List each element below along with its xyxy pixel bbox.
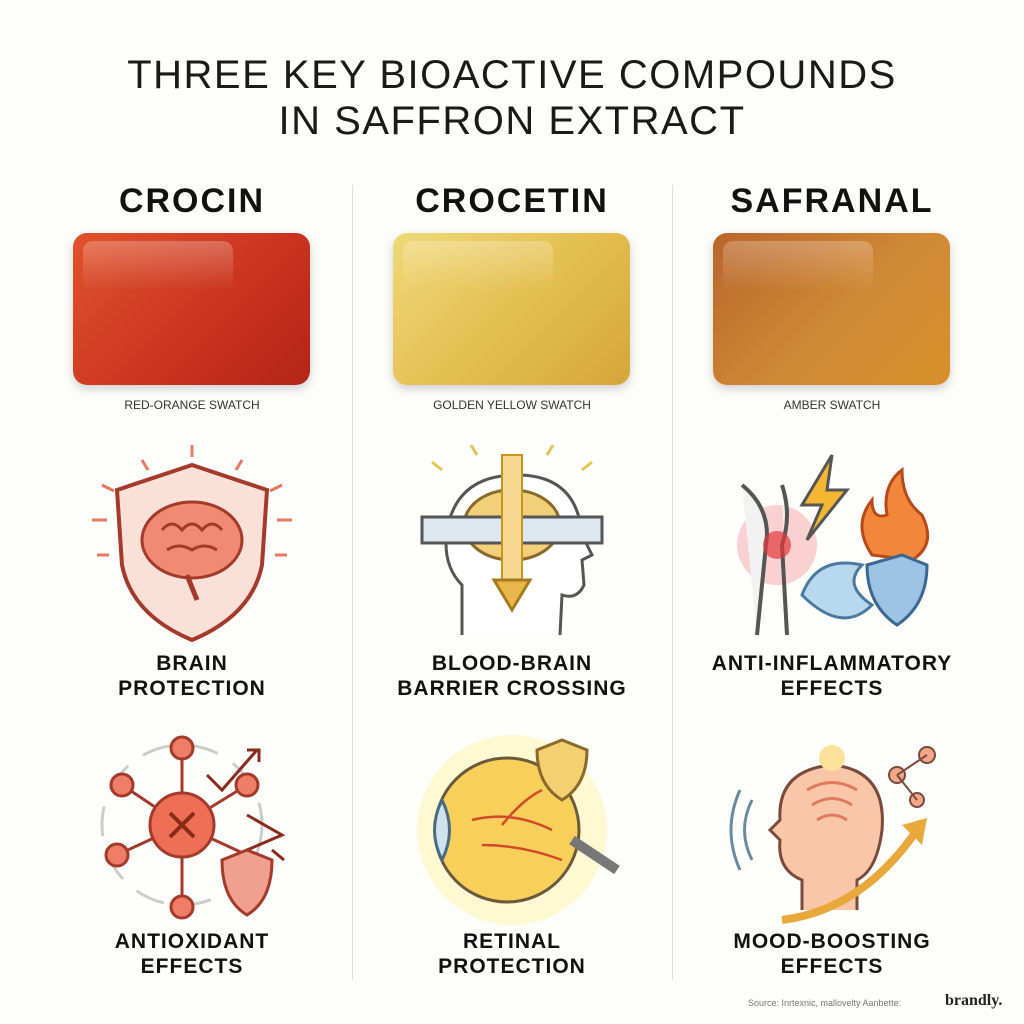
title [127, 53, 897, 143]
icon: inflammation [737, 454, 930, 636]
label: blood-brain barrier crossing: BARRIER CROSSING [397, 677, 627, 700]
label: anti-inflammatory effects: ANTI-INFLAMMATORY [712, 652, 952, 675]
label: antioxidant effects: ANTIOXIDANT [115, 930, 269, 953]
heading: crocin: CROCIN [119, 182, 265, 220]
footer: source: Source: Inrtexnic, mallovelty Aanbette: [748, 998, 901, 1008]
label: mood-boosting effects: EFFECTS [781, 955, 883, 978]
heading: safranal: SAFRANAL [730, 182, 933, 220]
swatch label: amber: AMBER SWATCH [784, 398, 880, 412]
label: blood-brain barrier crossing [397, 652, 627, 700]
label: anti-inflammatory effects [712, 652, 952, 700]
swatch: golden yellow [393, 233, 630, 385]
label: anti-inflammatory effects: EFFECTS [781, 677, 883, 700]
label: mood-boosting effects: MOOD-BOOSTING [733, 930, 931, 953]
swatch: red-orange [73, 233, 310, 385]
swatch: amber [713, 233, 950, 385]
label: blood-brain barrier crossing: BLOOD-BRAIN [432, 652, 592, 675]
title: THREE KEY BIOACTIVE COMPOUNDS [127, 53, 897, 97]
label: mood-boosting effects [733, 930, 931, 978]
icon: brain shield [92, 445, 292, 642]
label: retinal protection: RETINAL [463, 930, 561, 953]
label: antioxidant effects: EFFECTS [141, 955, 243, 978]
label: brain protection [118, 652, 266, 700]
label: brain protection: BRAIN [156, 652, 228, 675]
label: brain protection: PROTECTION [118, 677, 266, 700]
label: antioxidant effects [115, 930, 269, 978]
icon: antioxidant [100, 736, 286, 920]
label: retinal protection [438, 930, 586, 978]
footer: brand: brandly. [945, 992, 1002, 1009]
title: IN SAFFRON EXTRACT [278, 99, 746, 143]
icon: eye retina [417, 735, 620, 925]
swatch label: golden yellow: GOLDEN YELLOW SWATCH [433, 398, 591, 412]
heading: crocetin: CROCETIN [415, 182, 609, 220]
label: retinal protection: PROTECTION [438, 955, 586, 978]
swatch label: red-orange: RED-ORANGE SWATCH [124, 398, 260, 412]
icon: blood brain barrier [420, 445, 604, 636]
icon: mood head [730, 745, 936, 924]
